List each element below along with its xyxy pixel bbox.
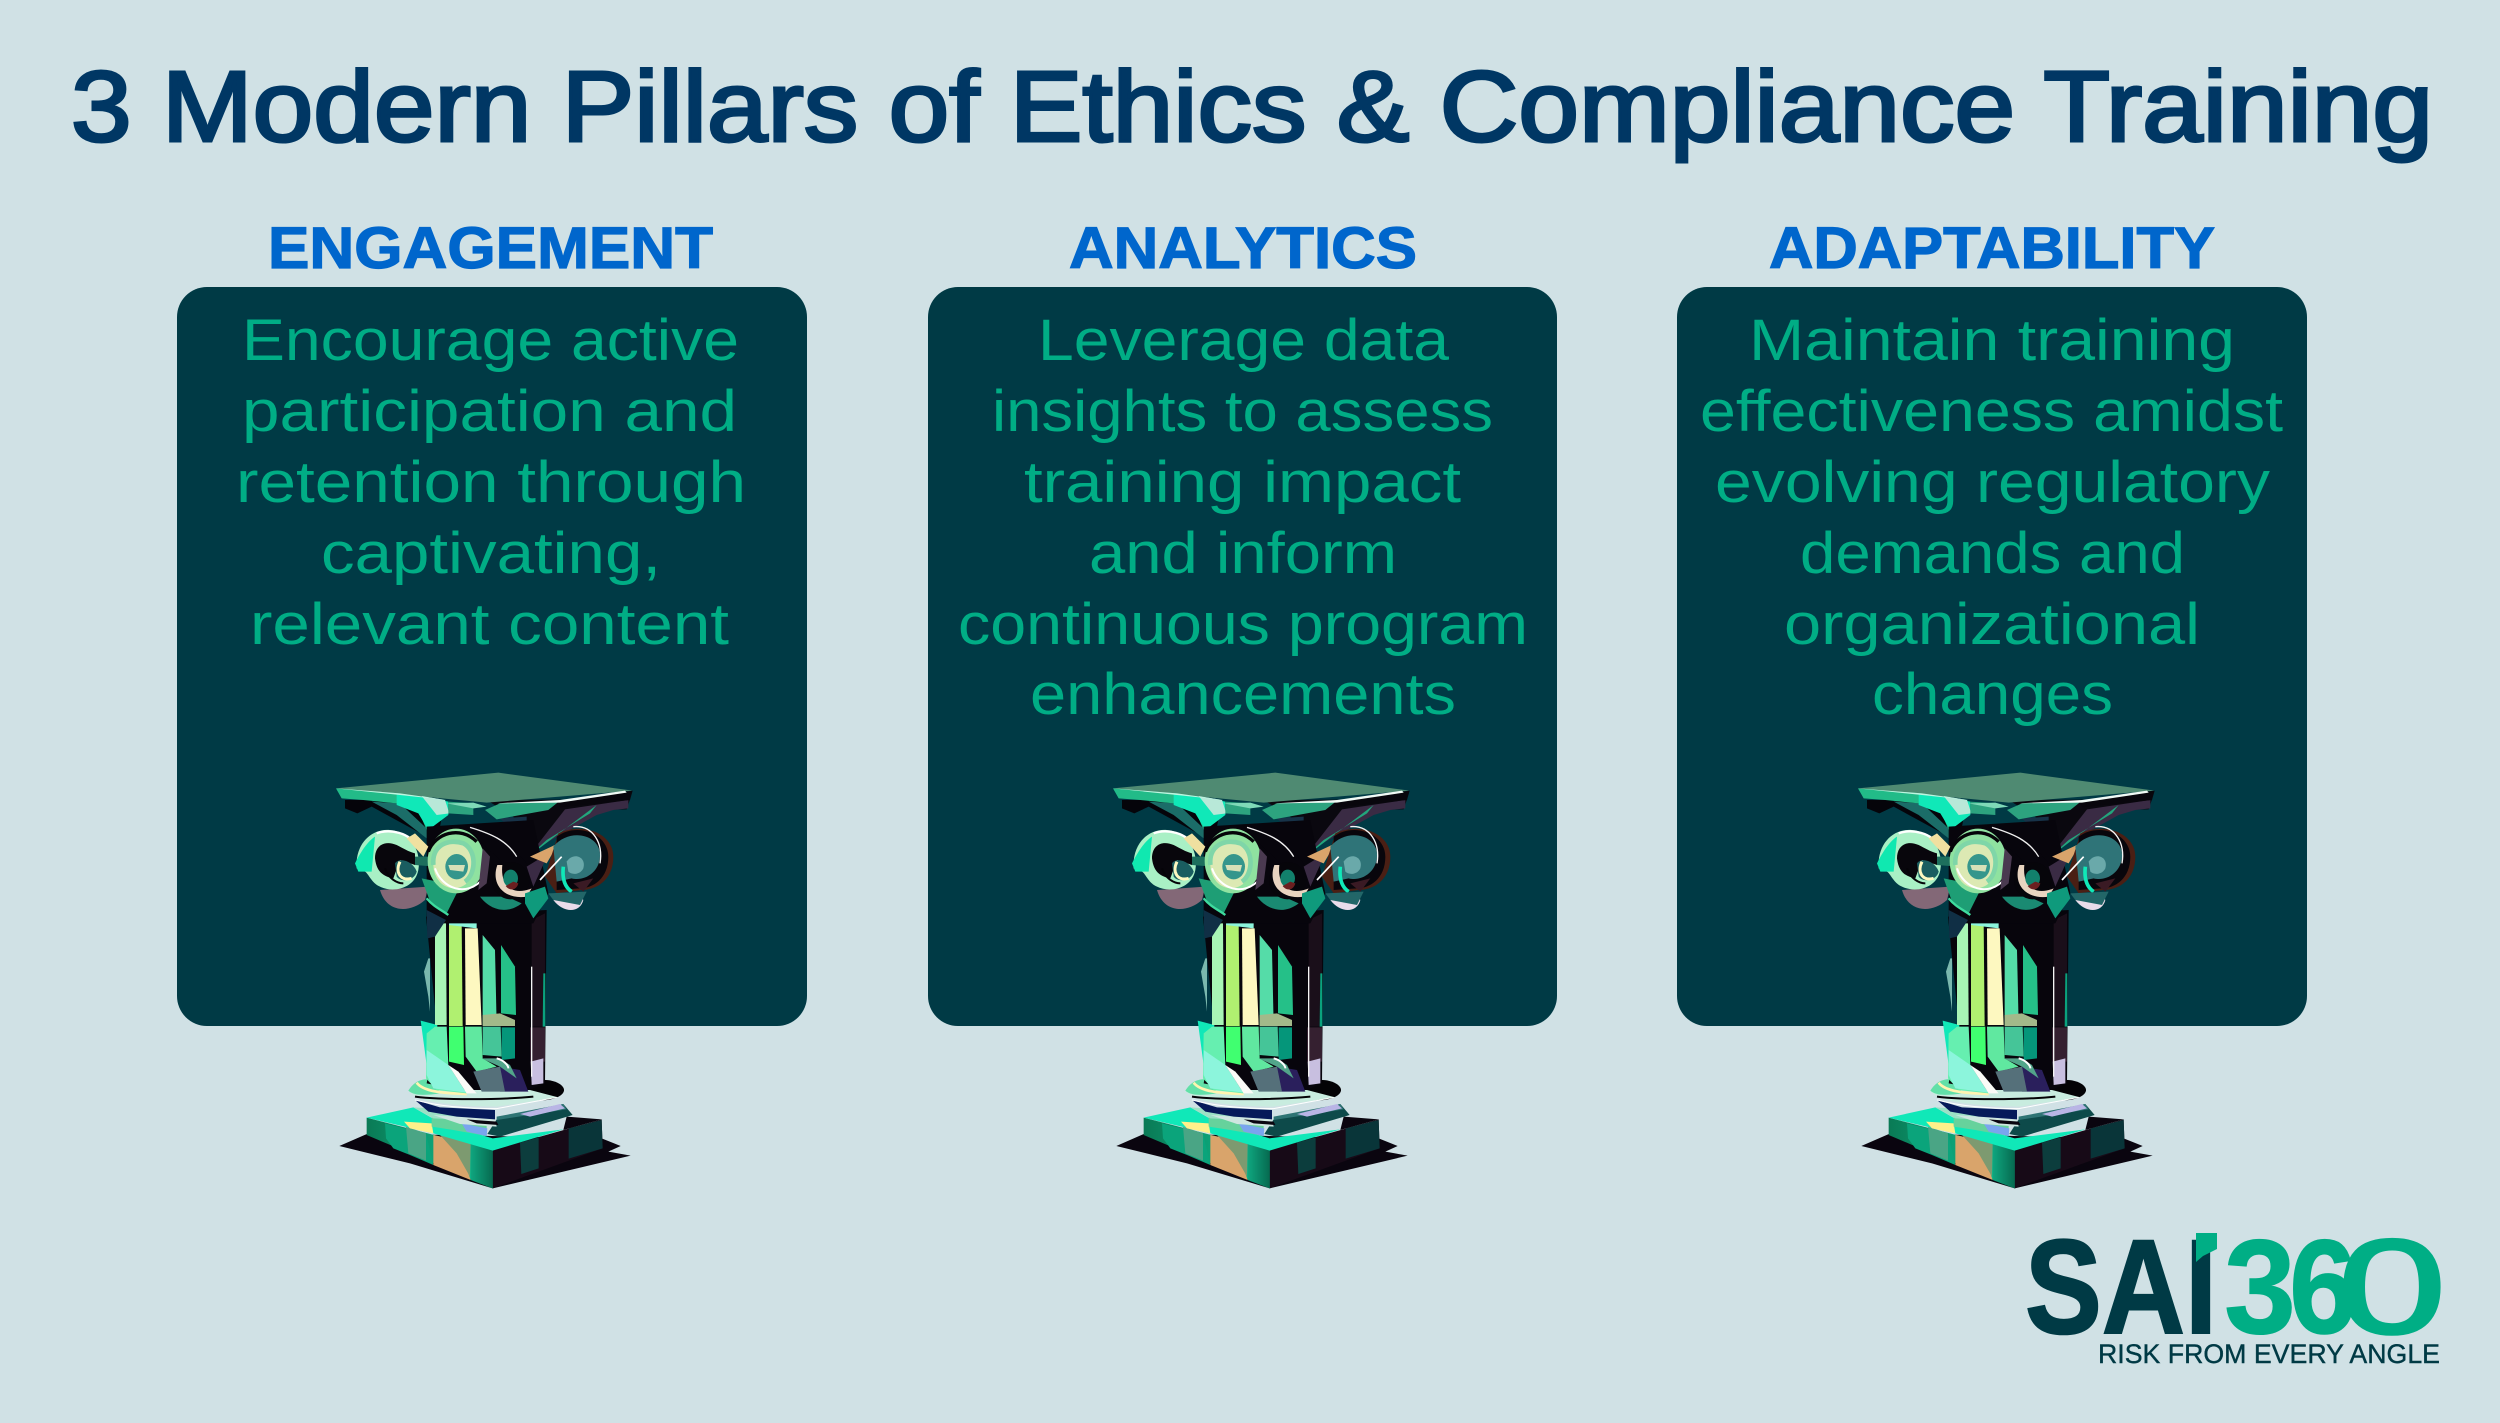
- text block: engagement description: [236, 308, 746, 657]
- logo numerals 360: 6: [2289, 1213, 2357, 1362]
- text block: analytics description: continuous program: [958, 592, 1528, 657]
- panel: adaptability: [1677, 216, 2307, 1188]
- logo wordmark SAI: SAI: [2025, 1213, 2217, 1362]
- logo numerals 360: 0: [2338, 1213, 2446, 1362]
- text block: adaptability description: evolving regulatory: [1715, 450, 2270, 515]
- title: 3 Modern Pillars of Ethics & Compliance Training: [71, 51, 2433, 163]
- text block: engagement description: retention through: [236, 450, 746, 515]
- panel: engagement: [177, 216, 807, 1188]
- text block: adaptability description: organizational: [1784, 592, 2200, 657]
- icon: column pillar 1: [336, 773, 633, 1188]
- heading: analytics: ANALYTICS: [1069, 216, 1417, 281]
- text block: adaptability description: [1700, 308, 2283, 727]
- panel background: engagement: [177, 287, 807, 1026]
- text block: engagement description: participation and: [242, 379, 737, 444]
- text block: adaptability description: changes: [1872, 662, 2113, 727]
- logo numerals 360: [2224, 1213, 2446, 1362]
- panel: analytics: [928, 216, 1557, 1188]
- text block: analytics description: training impact: [1024, 450, 1461, 515]
- text block: adaptability description: demands and: [1800, 521, 2185, 586]
- logo tagline: RISK FROM EVERY ANGLE: [2098, 1339, 2440, 1369]
- heading: adaptability: ADAPTABILITY: [1769, 216, 2215, 281]
- logo: SAI360: [2025, 1213, 2446, 1369]
- text block: analytics description: insights to assess: [992, 379, 1493, 444]
- heading: engagement: ENGAGEMENT: [268, 216, 713, 281]
- panel background: adaptability: [1677, 287, 2307, 1026]
- logo numerals 360: 3: [2224, 1213, 2296, 1362]
- panel background: analytics: [928, 287, 1557, 1026]
- text block: adaptability description: effectiveness amidst: [1700, 379, 2283, 444]
- text block: analytics description: [958, 308, 1528, 727]
- icon: column pillar 3: [1858, 773, 2155, 1188]
- text block: analytics description: and inform: [1089, 521, 1397, 586]
- logo accent on letter I: [2196, 1233, 2217, 1262]
- text block: adaptability description: Maintain training: [1749, 308, 2235, 373]
- text block: analytics description: enhancements: [1030, 662, 1456, 727]
- text block: engagement description: Encourage active: [242, 308, 739, 373]
- text block: engagement description: captivating,: [321, 521, 661, 586]
- text block: analytics description: Leverage data: [1038, 308, 1450, 373]
- icon: column pillar 2: [1113, 773, 1410, 1188]
- text block: engagement description: relevant content: [250, 592, 729, 657]
